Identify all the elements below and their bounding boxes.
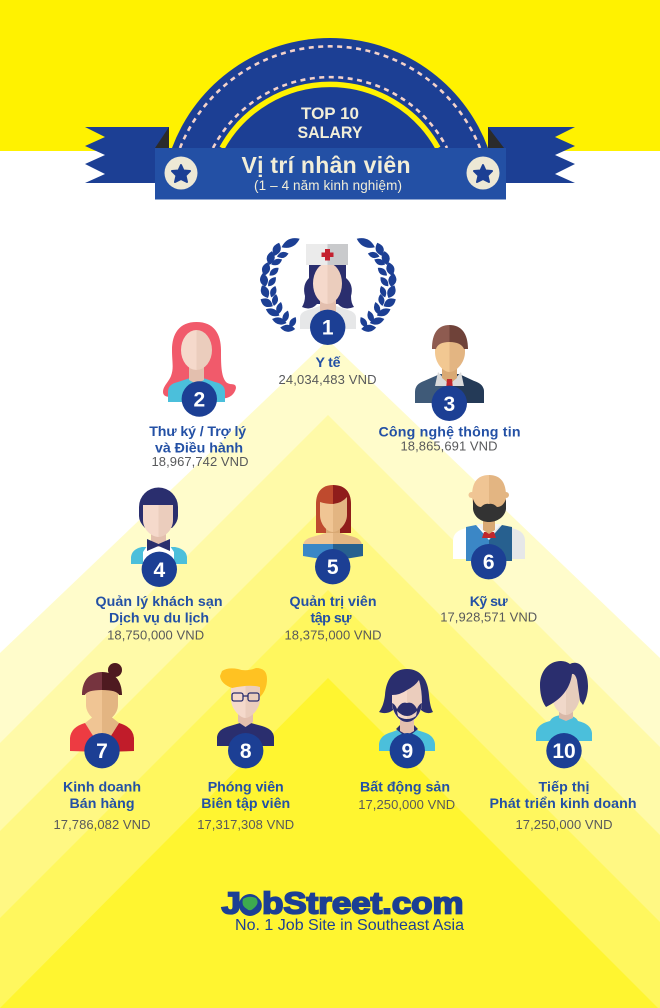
number badge 6: 6: [483, 551, 495, 574]
salary 6: 17,928,571 VND: [440, 610, 537, 625]
entry 3: IT: [378, 325, 520, 454]
dome: [172, 38, 488, 148]
icon: nurse avatar: [300, 244, 356, 329]
icon: right star: [466, 156, 500, 190]
label: journalist: [201, 780, 290, 812]
inner dashed arc: [213, 77, 447, 148]
label: trainee: tập sự: [310, 611, 352, 627]
number badge 8: [228, 733, 263, 768]
logo: [222, 886, 464, 934]
salary 1: 24,034,483 VND: [278, 372, 376, 387]
icon: side fringe avatar: [536, 661, 592, 741]
number badge 10: [546, 733, 582, 768]
entry 9: real estate: [358, 669, 455, 812]
entry 2: secretary: [149, 322, 248, 469]
label: sales: [63, 780, 141, 812]
number badge 3: [432, 386, 467, 421]
label: secretary: và Điều hành: [155, 441, 243, 457]
banner title: Vị trí nhân viên: [242, 152, 410, 178]
icon: bow tie avatar: [131, 488, 187, 566]
icon: blond man with glasses avatar: [217, 668, 274, 746]
label: marketing: Tiếp thị: [538, 780, 590, 796]
number badge 5: 5: [327, 556, 339, 579]
icon: bearded man avatar: [453, 475, 525, 561]
label: secretary: Thư ký / Trợ lý: [149, 424, 246, 440]
salary 3: 18,865,691 VND: [400, 439, 498, 454]
right ribbon tail: [488, 127, 575, 183]
label: real estate: Bất động sản: [360, 780, 450, 796]
salary 5: 18,375,000 VND: [284, 627, 382, 642]
yellow arc: [222, 84, 438, 148]
number badge 7: [84, 733, 120, 768]
salary 9: 17,250,000 VND: [358, 797, 455, 812]
label: journalist: Phóng viên: [208, 780, 284, 796]
number badge 6: [471, 544, 506, 579]
icon: man in suit avatar: [415, 325, 484, 403]
salary 7: 17,786,082 VND: [54, 817, 150, 832]
label: trainee: Quản trị viên: [290, 594, 376, 610]
number badge 1: 1: [322, 316, 334, 340]
label: marketing: Phát triển kinh doanh: [490, 796, 636, 812]
entry 1: nurse: [258, 235, 398, 387]
number badge 8: 8: [240, 740, 252, 763]
number badge 4: [142, 552, 177, 587]
entry 6: engineer: [440, 475, 537, 625]
label: sales: Bán hàng: [70, 796, 134, 812]
salary 8: 17,317,308 VND: [197, 817, 294, 832]
banner: [155, 148, 506, 200]
label: hospitality: [96, 594, 222, 627]
number badge 5: [315, 549, 350, 584]
icon: woman with bun avatar: [70, 663, 134, 752]
icon: globe: [239, 894, 261, 916]
label: marketing: [490, 780, 636, 812]
icon: laurel wreath left: [258, 235, 301, 332]
salary 2: 18,967,742 VND: [152, 454, 248, 469]
logo wordmark: JobStreet.com: [222, 886, 464, 920]
label: secretary: [149, 424, 246, 457]
number badge 10: 10: [552, 740, 576, 763]
salary 10: 17,250,000 VND: [516, 817, 612, 832]
icon: red hair woman avatar: [163, 322, 236, 402]
label: engineer: Kỹ sư: [470, 594, 508, 610]
salary 4: 18,750,000 VND: [107, 627, 204, 642]
label: sales: Kinh doanh: [63, 780, 141, 796]
number badge 9: [390, 733, 425, 768]
icon: laurel wreath right: [355, 235, 398, 332]
entry 10: marketing: [490, 661, 636, 832]
number badge 3: 3: [443, 393, 455, 416]
banner subtitle: (1 – 4 năm kinh nghiệm): [254, 178, 402, 193]
number badge 4: 4: [153, 559, 165, 582]
label: trainee: [290, 594, 376, 627]
number badge 2: 2: [193, 388, 205, 412]
icon: long hair bearded man avatar: [379, 669, 435, 751]
logo tagline: No. 1 Job Site in Southeast Asia: [235, 917, 464, 934]
left ribbon tail: [85, 127, 169, 183]
number badge 7: 7: [96, 740, 108, 763]
salary text: SALARY: [298, 124, 362, 142]
number badge 9: 9: [401, 740, 413, 763]
label: Y tế: Y tế: [316, 355, 341, 371]
header badge: [85, 38, 575, 200]
ribbon folds: [155, 127, 504, 148]
number badge 2: [182, 381, 217, 417]
label: hospitality: Quản lý khách sạn: [96, 594, 222, 610]
label: IT: Công nghệ thông tin: [378, 424, 520, 440]
entry 8: journalist: [197, 668, 294, 832]
icon: left star: [164, 156, 198, 190]
label: journalist: Biên tập viên: [201, 796, 290, 812]
top 10 text: TOP 10: [301, 105, 359, 123]
entry 7: sales: [54, 663, 150, 832]
entry 4: hospitality: [96, 488, 222, 642]
outer dashed arc: [180, 46, 480, 148]
label: hospitality: Dịch vụ du lịch: [109, 611, 209, 627]
number badge 1: [310, 310, 345, 345]
entry 5: management trainee: [284, 485, 382, 642]
top yellow band: [0, 0, 660, 151]
icon: red hair short avatar: [303, 485, 363, 561]
